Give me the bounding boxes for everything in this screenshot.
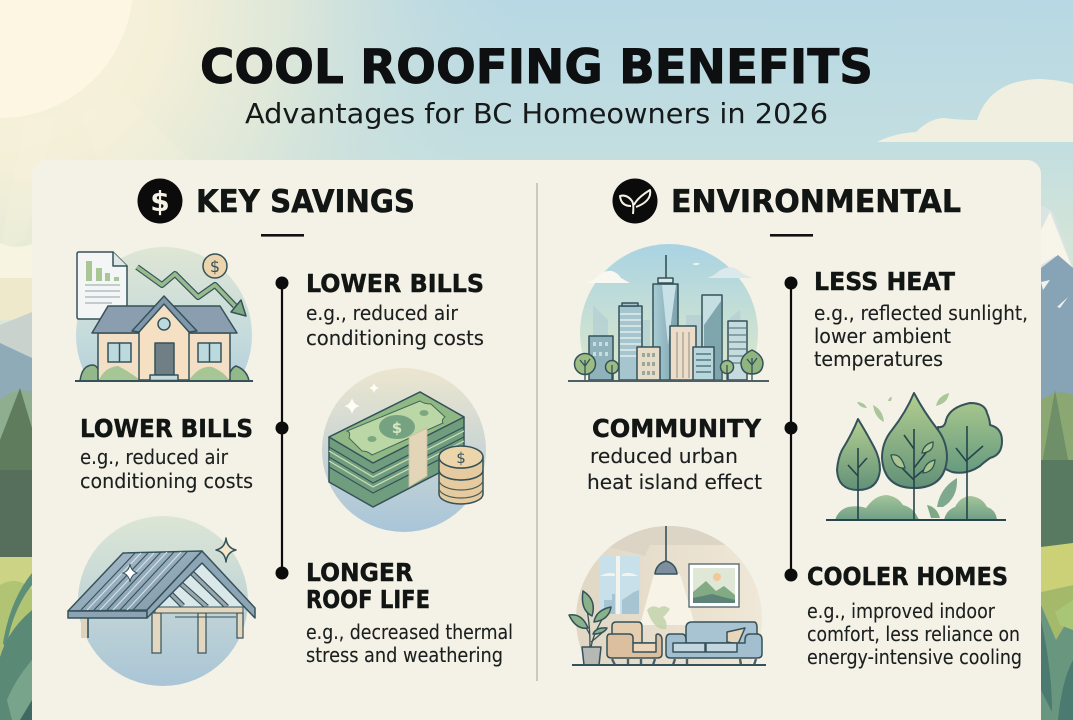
icon: house with falling bills — [75, 247, 253, 382]
panel: benefits card — [32, 160, 1041, 720]
text block: lower bills top — [306, 269, 484, 350]
icon: stack of money with coins — [322, 368, 486, 532]
text block: lower bills left — [80, 414, 253, 493]
text block: lower bills left: conditioning costs — [80, 469, 253, 493]
text block: lower bills left: LOWER BILLS — [80, 414, 253, 443]
text block: longer roof life: stress and weathering — [306, 643, 503, 667]
text block: cooler homes: COOLER HOMES — [807, 562, 1008, 591]
sun — [0, 0, 133, 118]
timeline: key savings — [276, 276, 288, 580]
cloud — [877, 79, 1073, 142]
text block: less heat: lower ambient — [814, 324, 951, 348]
heading: key savings: KEY SAVINGS — [196, 184, 415, 220]
heading: environmental — [612, 178, 961, 237]
icon: trees — [826, 393, 1006, 520]
main title: COOL ROOFING BENEFITS — [200, 40, 873, 95]
text block: lower bills top: e.g., reduced air — [306, 301, 459, 325]
heading: key savings: $ — [150, 185, 170, 218]
text block: less heat: e.g., reflected sunlight, — [814, 301, 1028, 325]
text block: less heat — [814, 267, 1028, 371]
text block: cooler homes: comfort, less reliance on — [807, 622, 1020, 646]
text block: lower bills top: LOWER BILLS — [306, 269, 484, 298]
text block: community: heat island effect — [587, 470, 762, 494]
text block: lower bills left: e.g., reduced air — [80, 445, 229, 469]
text block: community: reduced urban — [590, 444, 738, 468]
text block: cooler homes: e.g., improved indoor — [807, 599, 996, 623]
text block: community: COMMUNITY — [592, 414, 762, 443]
heading: key savings — [138, 178, 415, 237]
text block: longer roof life: LONGER — [306, 558, 413, 587]
timeline: environmental — [784, 276, 798, 582]
text block: cooler homes: energy-intensive cooling — [807, 645, 1022, 669]
icon: stack of money with coins: $ — [392, 419, 402, 437]
text block: less heat: LESS HEAT — [814, 267, 955, 296]
text block: longer roof life: e.g., decreased thermal — [306, 620, 513, 644]
icon: city skyline — [568, 244, 769, 382]
text block: less heat: temperatures — [814, 347, 943, 371]
text block: longer roof life: ROOF LIFE — [306, 585, 430, 614]
icon: stack of money with coins: $ — [456, 449, 466, 467]
icon: metal roof — [68, 516, 255, 686]
icon: living room — [569, 526, 770, 665]
text block: community — [587, 414, 762, 494]
subtitle: Advantages for BC Homeowners in 2026 — [245, 97, 828, 130]
icon: house with falling bills: $ — [210, 257, 220, 276]
text block: cooler homes — [807, 562, 1022, 669]
text block: lower bills top: conditioning costs — [306, 326, 484, 350]
text block: longer roof life — [306, 558, 513, 667]
heading: environmental: ENVIRONMENTAL — [671, 184, 961, 220]
